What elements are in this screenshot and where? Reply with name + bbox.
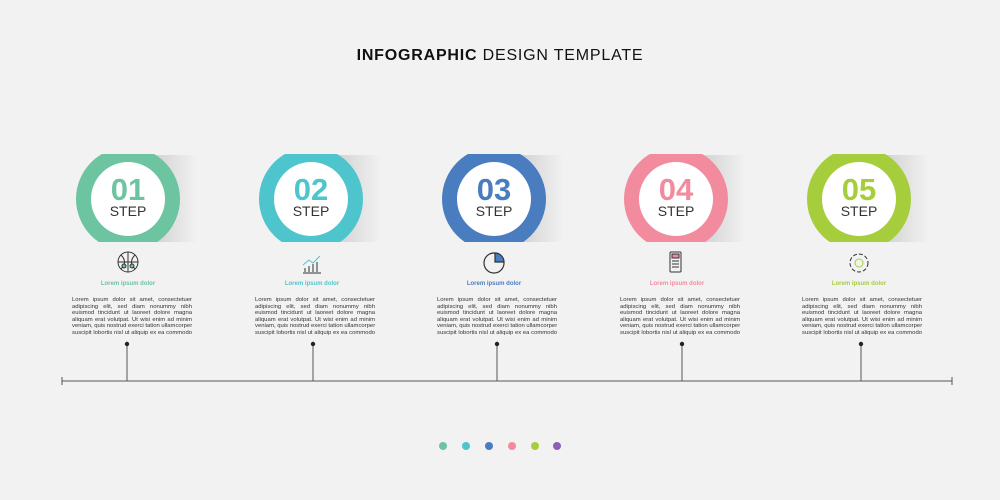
text 1: suscipit lobortis nisl ut aliquip ex ea commodo	[72, 330, 192, 336]
text 4: euismod tincidunt ut laoreet dolore magna	[620, 310, 740, 316]
step 03	[442, 154, 552, 242]
step 04: STEP	[658, 203, 694, 219]
text 5: aliquam erat volutpat. Ut wisi enim ad minim	[802, 316, 922, 322]
heading 2: Lorem ipsum dolor	[285, 281, 339, 287]
text 1: veniam, quis nostrud exerci tation ullamcorper	[72, 323, 192, 329]
text 5	[802, 297, 922, 336]
text 4: adipiscing elit, sed diam nonummy nibh	[620, 304, 740, 310]
text 1: euismod tincidunt ut laoreet dolore magna	[72, 310, 192, 316]
text 3	[437, 297, 558, 336]
text 5: Lorem ipsum dolor sit amet, consectetuer	[802, 297, 922, 303]
text 1: aliquam erat volutpat. Ut wisi enim ad minim	[72, 316, 192, 322]
text 1: Lorem ipsum dolor sit amet, consectetuer	[72, 297, 192, 303]
step 05	[807, 154, 918, 242]
text 3: aliquam erat volutpat. Ut wisi enim ad minim	[437, 316, 557, 322]
step 01: 01	[111, 172, 145, 207]
text 2	[255, 297, 376, 336]
text 2: suscipit lobortis nisl ut aliquip ex ea commodo	[255, 330, 375, 336]
step 05: 05	[842, 172, 876, 207]
text 3: adipiscing elit, sed diam nonummy nibh	[437, 304, 557, 310]
step 03: 03	[477, 172, 511, 207]
text 5: veniam, quis nostrud exerci tation ullamcorper	[802, 323, 922, 329]
text 3: veniam, quis nostrud exerci tation ullamcorper	[437, 323, 557, 329]
text 2: adipiscing elit, sed diam nonummy nibh	[255, 304, 375, 310]
icon: chart	[303, 256, 321, 273]
icon: globe	[118, 252, 138, 272]
text 5: suscipit lobortis nisl ut aliquip ex ea commodo	[802, 330, 922, 336]
text 4: Lorem ipsum dolor sit amet, consectetuer	[620, 297, 740, 303]
heading 4: Lorem ipsum dolor	[650, 281, 704, 287]
step 02: 02	[294, 172, 328, 207]
text 3: Lorem ipsum dolor sit amet, consectetuer	[437, 297, 557, 303]
text 3: suscipit lobortis nisl ut aliquip ex ea commodo	[437, 330, 557, 336]
step 04: 04	[659, 172, 694, 207]
text 5: euismod tincidunt ut laoreet dolore magna	[802, 310, 922, 316]
text 3: euismod tincidunt ut laoreet dolore magna	[437, 310, 557, 316]
step 02: STEP	[293, 203, 329, 219]
text 4: suscipit lobortis nisl ut aliquip ex ea commodo	[620, 330, 740, 336]
icon: gear	[850, 254, 868, 272]
text 2: aliquam erat volutpat. Ut wisi enim ad minim	[255, 316, 375, 322]
text 1	[72, 297, 192, 336]
text 5: adipiscing elit, sed diam nonummy nibh	[802, 304, 922, 310]
heading 1: Lorem ipsum dolor	[101, 281, 155, 287]
icon: pie	[484, 253, 504, 273]
step 02	[259, 154, 370, 242]
icon: calculator	[670, 252, 681, 272]
text 2: euismod tincidunt ut laoreet dolore magna	[255, 310, 375, 316]
dots	[439, 442, 561, 450]
timeline	[62, 344, 952, 385]
text 2: veniam, quis nostrud exerci tation ullamcorper	[255, 323, 375, 329]
text 4	[620, 297, 740, 336]
title: INFOGRAPHIC DESIGN TEMPLATE	[357, 47, 643, 64]
text 1: adipiscing elit, sed diam nonummy nibh	[72, 304, 192, 310]
heading 3: Lorem ipsum dolor	[467, 281, 521, 287]
step 01: STEP	[110, 203, 146, 219]
heading 5: Lorem ipsum dolor	[832, 281, 886, 287]
step 04	[624, 154, 734, 242]
step 03: STEP	[476, 203, 512, 219]
step 05: STEP	[841, 203, 877, 219]
steps graphic	[62, 154, 952, 450]
text 2: Lorem ipsum dolor sit amet, consectetuer	[255, 297, 375, 303]
text 4: veniam, quis nostrud exerci tation ullamcorper	[620, 323, 740, 329]
text 4: aliquam erat volutpat. Ut wisi enim ad minim	[620, 316, 740, 322]
step 01	[76, 154, 186, 242]
